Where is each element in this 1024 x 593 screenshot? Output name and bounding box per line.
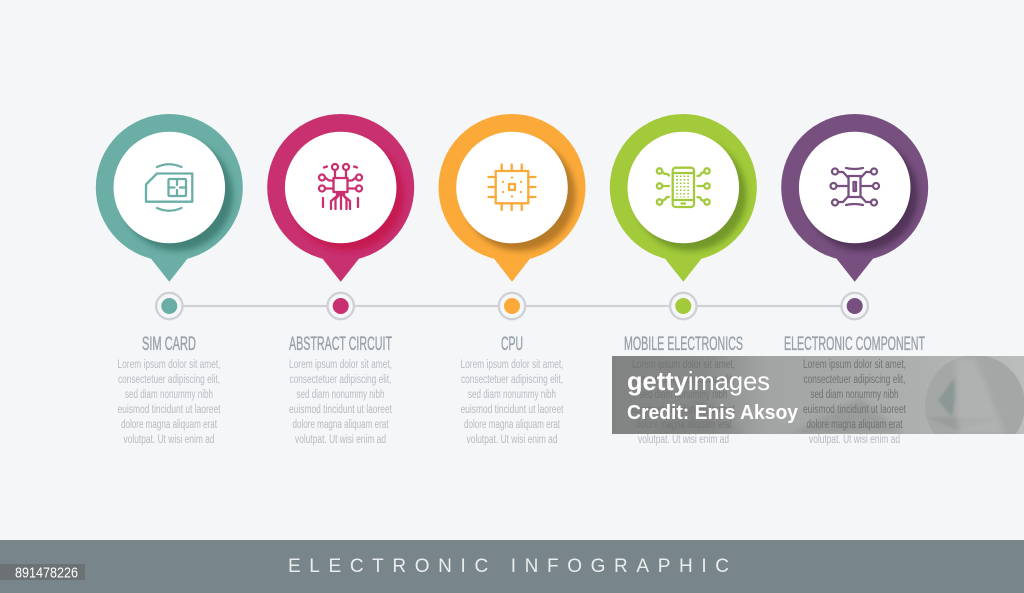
text block: euismod tincidunt ut laoreet xyxy=(803,404,907,416)
text block: dolore magna aliquam erat xyxy=(464,419,561,431)
text block: euismod tincidunt ut laoreet xyxy=(460,404,564,416)
text block: sed diam nonummy nibh xyxy=(810,389,898,401)
timeline node xyxy=(499,293,525,319)
text block: volutpat. Ut wisi enim ad xyxy=(124,434,214,446)
text block: euismod tincidunt ut laoreet xyxy=(632,404,736,416)
text block: volutpat. Ut wisi enim ad xyxy=(295,434,386,446)
text block: dolore magna aliquam erat xyxy=(121,419,218,431)
text block: euismod tincidunt ut laoreet xyxy=(289,404,393,416)
text block: consectetuer adipiscing elit, xyxy=(632,374,734,386)
text block: volutpat. Ut wisi enim ad xyxy=(466,434,558,446)
text block: sed diam nonummy nibh xyxy=(296,389,384,401)
panel: electronic component xyxy=(781,114,928,446)
text block xyxy=(460,359,564,446)
watermark credit: Credit: Enis Aksoy xyxy=(627,402,799,424)
footer bar xyxy=(0,540,1024,593)
text block: dolore magna aliquam erat xyxy=(806,419,903,431)
pin marker xyxy=(96,114,243,282)
icon: abstract circuit xyxy=(319,164,362,209)
icon: mobile electronics xyxy=(657,168,710,207)
pin marker xyxy=(781,114,928,282)
icon: electronic component xyxy=(830,168,879,206)
text block: sed diam nonummy nibh xyxy=(640,389,728,401)
text block: sed diam nonummy nibh xyxy=(468,389,556,401)
heading: CPU xyxy=(501,334,523,355)
text block: Lorem ipsum dolor sit amet, xyxy=(460,359,564,371)
heading: SIM CARD xyxy=(142,334,196,355)
timeline node xyxy=(328,293,354,319)
image id tag: 891478226 xyxy=(15,564,78,582)
text block: dolore magna aliquam erat xyxy=(636,419,732,431)
text block: sed diam nonummy nibh xyxy=(125,389,213,401)
panel: mobile electronics xyxy=(610,114,757,446)
text block: Lorem ipsum dolor sit amet, xyxy=(289,359,392,371)
text block xyxy=(289,359,393,446)
icon: sim card xyxy=(146,164,192,211)
pin marker xyxy=(438,114,586,282)
text block: consectetuer adipiscing elit, xyxy=(290,374,392,386)
heading: ABSTRACT CIRCUIT xyxy=(289,334,392,355)
text block xyxy=(118,359,221,446)
pin marker xyxy=(267,114,414,282)
text block: volutpat. Ut wisi enim ad xyxy=(809,434,900,446)
text block: dolore magna aliquam erat xyxy=(292,419,389,431)
text block: euismod tincidunt ut laoreet xyxy=(118,404,221,416)
pin marker xyxy=(610,114,757,282)
timeline node xyxy=(670,293,696,319)
text block: consectetuer adipiscing elit, xyxy=(461,374,563,386)
text block xyxy=(803,359,907,446)
text block: Lorem ipsum dolor sit amet, xyxy=(803,359,906,371)
text block xyxy=(632,359,736,446)
watermark band xyxy=(612,356,1024,434)
timeline connector xyxy=(169,305,855,307)
panel: cpu xyxy=(438,114,586,446)
heading: MOBILE ELECTRONICS xyxy=(624,334,743,355)
watermark logo: gettyimages xyxy=(627,366,770,396)
timeline node xyxy=(156,293,182,319)
icon: cpu xyxy=(488,164,536,210)
panel: abstract circuit xyxy=(267,114,414,446)
timeline node xyxy=(842,293,868,319)
text block: Lorem ipsum dolor sit amet, xyxy=(632,359,735,371)
text block: consectetuer adipiscing elit, xyxy=(118,374,220,386)
panel: sim card xyxy=(96,114,243,446)
text block: Lorem ipsum dolor sit amet, xyxy=(118,359,220,371)
text block: consectetuer adipiscing elit, xyxy=(804,374,906,386)
footer title: ELECTRONIC INFOGRAPHIC xyxy=(288,556,729,577)
text block: volutpat. Ut wisi enim ad xyxy=(638,434,729,446)
